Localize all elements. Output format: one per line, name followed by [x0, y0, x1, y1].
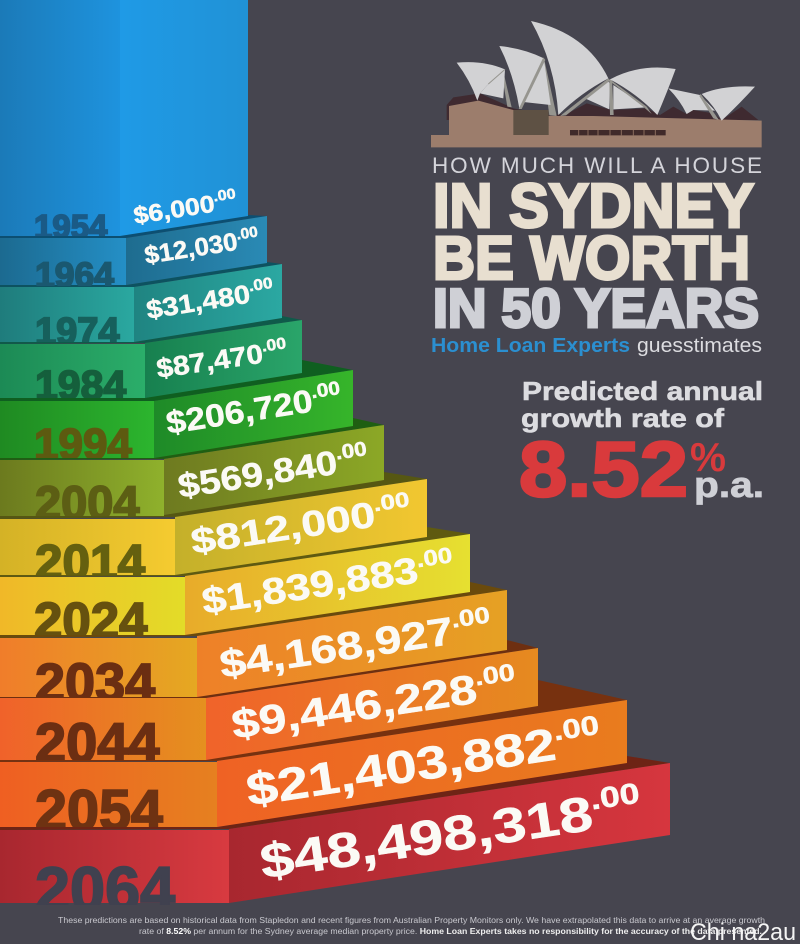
left face 1974 [0, 287, 134, 342]
callout: predicted annual growth rate: Predicted annual [522, 376, 763, 406]
step: 2054 [0, 680, 627, 843]
left face 1954 [0, 0, 120, 236]
callout: predicted annual growth rate: 8.52 [519, 425, 688, 513]
price 1954: .00 [212, 186, 237, 205]
heading: how much will a house: HOW MUCH WILL A HOUSE [432, 153, 762, 178]
price 2014: .00 [372, 488, 411, 516]
left face 1994 [0, 401, 154, 458]
right face 2014 [175, 479, 427, 575]
callout: predicted annual growth rate: growth rate of [521, 403, 724, 433]
left face 2014 [0, 519, 175, 575]
byline: guesstimates [637, 335, 762, 357]
price 2004: $569,840 [175, 447, 321, 506]
left face 2044 [0, 698, 206, 760]
price 2024: .00 [415, 542, 454, 572]
step: 2014 [0, 472, 427, 575]
price 1994: $206,720 [164, 385, 301, 441]
price 2064: .00 [588, 778, 642, 817]
right face 1984 [145, 320, 302, 398]
right face 2034 [197, 590, 507, 697]
price 2044: .00 [473, 659, 517, 692]
left face 2054 [0, 762, 217, 827]
right face 2004 [164, 425, 384, 515]
right face 2064 [229, 763, 670, 903]
price 1994: .00 [309, 378, 342, 403]
right face 1974 [134, 264, 282, 342]
right face 1954 [120, 0, 248, 236]
price 2034: .00 [449, 601, 491, 633]
right face 1964 [126, 216, 267, 285]
callout: predicted annual growth rate: % [690, 434, 726, 480]
year 1994: 1994 [34, 420, 132, 469]
heading: in Sydney: IN SYDNEY [433, 172, 754, 241]
left face 2064 [0, 830, 229, 903]
price 1984: .00 [261, 335, 287, 356]
right face 1994 [154, 370, 353, 458]
heading: in 50 years: IN 50 YEARS [433, 277, 759, 339]
year 1984: 1984 [35, 362, 126, 408]
year 2034: 2034 [35, 653, 155, 713]
step: 1974 [0, 262, 282, 342]
price 2044: $9,446,228 [229, 672, 438, 748]
byline [431, 335, 762, 357]
price 1964: .00 [235, 223, 259, 244]
footnote [58, 915, 765, 936]
price 2024: $1,839,883 [199, 554, 388, 622]
price 2054: $21,403,882 [243, 726, 503, 816]
price 2004: .00 [334, 438, 368, 465]
year 2014: 2014 [35, 535, 146, 590]
heading: be worth: BE WORTH [433, 224, 750, 292]
year 1974: 1974 [35, 311, 120, 353]
callout: predicted annual growth rate [519, 376, 764, 513]
year 1954: 1954 [34, 208, 108, 245]
step: 2044 [0, 640, 538, 760]
price 2014: $812,000 [188, 499, 343, 562]
year 2004: 2004 [35, 476, 140, 529]
year 2064: 2064 [35, 855, 175, 925]
year 2054: 2054 [35, 779, 163, 843]
step: 2024 [0, 527, 470, 635]
left face 1984 [0, 344, 145, 398]
year 2044: 2044 [35, 711, 160, 774]
left face 2024 [0, 577, 185, 635]
step: 2064 [0, 756, 670, 903]
right face 2024 [185, 534, 470, 635]
step: 1984 [0, 316, 302, 398]
footnote: These predictions are based on historical data from Stapledon and recent figures from Australian Property Monitors only. We have extrapolated this data to arrive at an average growth [58, 915, 765, 925]
price 2064: $48,498,318 [257, 796, 534, 890]
price 1964: $12,030 [143, 228, 236, 270]
right face 2054 [217, 700, 627, 827]
price 2054: .00 [551, 710, 601, 746]
step: 2034 [0, 582, 507, 697]
step: 2004 [0, 418, 384, 516]
price 1974: $31,480 [144, 280, 242, 325]
year 2024: 2024 [34, 592, 148, 649]
byline: Home Loan Experts [431, 335, 630, 357]
left face 2004 [0, 460, 164, 516]
left face 2034 [0, 638, 197, 697]
price 1984: $87,470 [155, 340, 255, 384]
callout: predicted annual growth rate: p.a. [694, 464, 764, 505]
right face 2044 [206, 648, 538, 760]
step: 1964 [0, 215, 267, 286]
step: 1954 [0, 0, 248, 245]
footnote: rate of 8.52% per annum for the Sydney average median property price. Home Loan Experts takes no responsibility for the accuracy of the data presented. [139, 926, 762, 936]
icon: Sydney Opera House [431, 21, 762, 147]
price 2034: $4,168,927 [217, 616, 416, 687]
left face 1964 [0, 238, 126, 285]
price 1974: .00 [247, 275, 274, 295]
price 1954: $6,000 [132, 192, 208, 230]
step: 1994 [0, 360, 353, 458]
year 1964: 1964 [35, 255, 114, 295]
